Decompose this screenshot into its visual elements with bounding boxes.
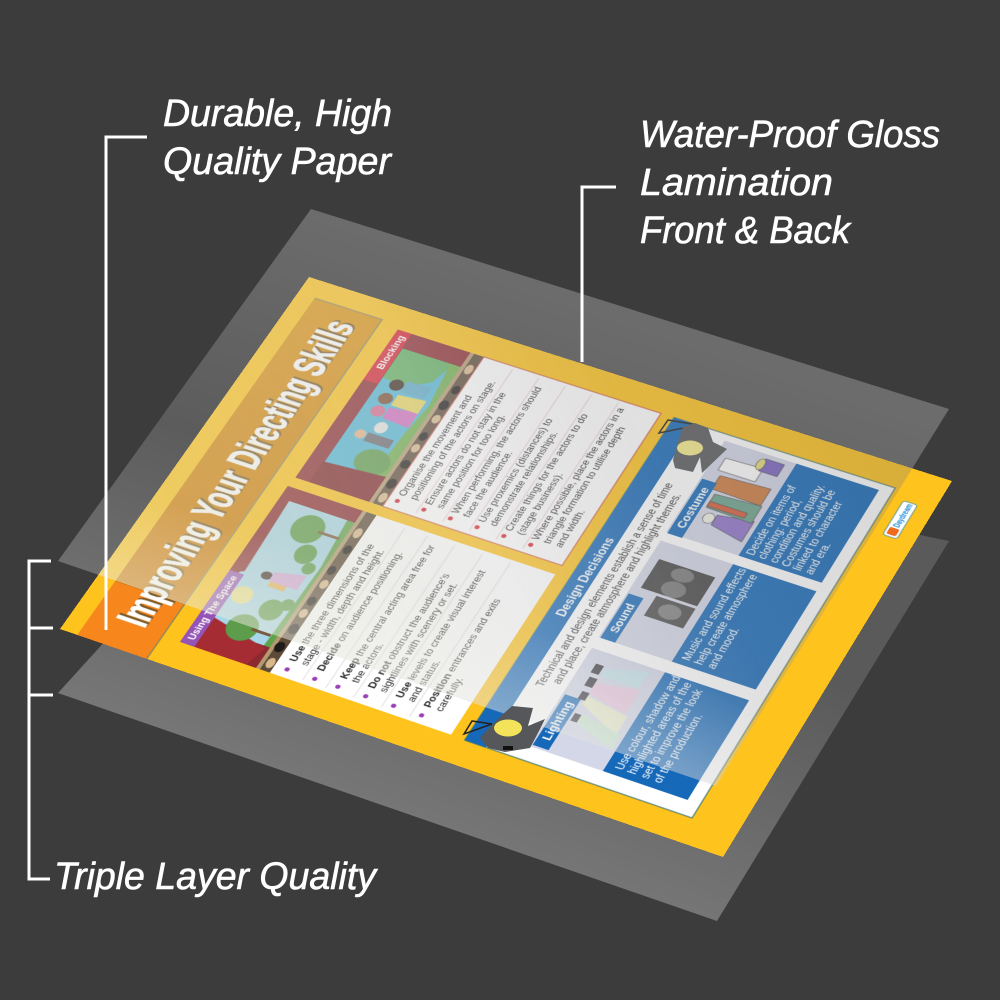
text box: blocking bullets: When performing, the actors should bbox=[454, 396, 559, 520]
text box: lighting: highlighted areas of the bbox=[609, 670, 683, 754]
column: lighting bbox=[529, 647, 749, 800]
tag: costume: Costume bbox=[677, 490, 719, 532]
top lamination sheet bbox=[58, 209, 949, 786]
text box: using the space bullets: Use the three dimensions of the bbox=[285, 546, 380, 658]
heading: lamination: Front & Back bbox=[640, 210, 852, 252]
text box: using the space bullets: the actors. bbox=[346, 637, 384, 676]
tag: sound: Sound bbox=[602, 599, 635, 629]
intro text: Technical and design elements establish a sense of time bbox=[527, 487, 683, 678]
tag: lighting: Lighting bbox=[528, 688, 567, 726]
panel: using the space bbox=[180, 486, 555, 735]
column: sound bbox=[599, 541, 816, 690]
speakers illustration bbox=[627, 559, 715, 629]
heading: lamination bbox=[640, 114, 940, 252]
header band bbox=[465, 417, 695, 747]
callout: lamination bracket bbox=[582, 187, 616, 362]
stage illustration bbox=[180, 486, 376, 673]
text box: using the space bullets: Position entrances and exits bbox=[415, 596, 502, 698]
text box: using the space bullets: sightlines with scenery or set. bbox=[373, 582, 461, 685]
heading: durable paper: Quality Paper bbox=[163, 141, 392, 183]
tag: sound bbox=[600, 593, 644, 643]
callout: durable paper bracket bbox=[106, 137, 147, 630]
text box: blocking bullets: demonstrate relationships. bbox=[491, 438, 572, 531]
heading: lamination: Lamination bbox=[640, 162, 833, 204]
text box: blocking bullets: Where possible, place the actors in a bbox=[532, 415, 641, 544]
text box: using the space bullets: Use levels to create visual interest bbox=[388, 570, 489, 689]
column: costume bbox=[666, 441, 879, 583]
stage illustration bbox=[295, 329, 484, 506]
text box: using the space bullets: and status. bbox=[399, 652, 439, 693]
poster background bbox=[60, 277, 952, 857]
heading: durable paper bbox=[163, 93, 392, 183]
text box: sound: and mood. bbox=[695, 620, 735, 660]
text box: sound: help create atmosphere bbox=[683, 571, 758, 657]
text box: using the space bullets: stage - width, depth and height. bbox=[296, 551, 390, 661]
text box: blocking bullets bbox=[383, 357, 661, 565]
text box: blocking bullets: Organise the movement and bbox=[402, 404, 487, 504]
text box: using the space bullets: Do not obstruct the audience's bbox=[361, 573, 453, 681]
panel: design decisions bbox=[465, 417, 895, 818]
text box: blocking bullets: Create things for the actors to do bbox=[506, 421, 604, 536]
heading: durable paper: Durable, High bbox=[163, 93, 392, 135]
text box: blocking bullets: face the audience. bbox=[465, 458, 525, 523]
text box: using the space bullets: Decide on audience positioning. bbox=[312, 553, 408, 666]
text box: using the space bullets: carefully. bbox=[426, 668, 461, 701]
text box: blocking bullets: Use proxemics (distances) to bbox=[480, 426, 568, 528]
callout: triple layer bracket bbox=[29, 561, 53, 879]
text box: costume: Decide on items of bbox=[744, 488, 806, 556]
text box: blocking bullets: Ensure actors do not stay in the bbox=[428, 401, 522, 512]
text box: lighting: set to improve the look bbox=[621, 676, 694, 758]
tag: blocking: Blocking bbox=[386, 346, 422, 382]
text box: blocking bullets: (stage business). bbox=[517, 478, 573, 539]
text box: costume: Costumes should be bbox=[778, 492, 844, 567]
text box: costume: clothing: period, bbox=[756, 501, 809, 560]
bottom lamination sheet bbox=[58, 410, 949, 921]
logo badge: Daydream bbox=[892, 504, 918, 529]
text box: blocking bullets: same position for too long. bbox=[439, 422, 519, 515]
text box: lighting bbox=[603, 672, 749, 800]
text box: costume: and era. bbox=[800, 541, 834, 573]
header band: Design Decisions bbox=[549, 537, 620, 614]
costumes illustration bbox=[684, 448, 789, 542]
characters bbox=[351, 376, 435, 450]
text box: lighting: of the production. bbox=[633, 698, 691, 762]
overlays, lamps, callouts and labels bbox=[28, 98, 940, 898]
text box: blocking bullets: positioning of the actors on stage. bbox=[413, 390, 512, 507]
text box: costume: linked to character bbox=[789, 502, 850, 570]
lamp: lower left stage light bbox=[464, 706, 545, 752]
logo badge bbox=[883, 501, 918, 539]
top sheet wash over poster bbox=[98, 277, 912, 786]
panel: blocking bbox=[295, 329, 661, 565]
text box: costume: condition and quality. bbox=[767, 487, 834, 563]
tag: using the space: Using The Space bbox=[185, 577, 242, 639]
poster: Improving Your Directing Skills bbox=[60, 277, 952, 857]
intro text: and place, create atmosphere and highlight themes. bbox=[543, 497, 690, 675]
tag: lighting bbox=[533, 694, 581, 750]
text box: blocking bullets: triangle formation to utilise depth bbox=[544, 434, 640, 547]
lighting rig illustration bbox=[554, 655, 659, 750]
text box: using the space bullets: Keep the central acting area free for bbox=[335, 546, 441, 673]
text box: sound: Music and sound effects bbox=[671, 566, 747, 653]
text box: blocking bullets: and width. bbox=[555, 513, 593, 551]
text box: costume bbox=[738, 464, 879, 583]
heading: triple layer quality: Triple Layer Quality bbox=[54, 856, 378, 898]
text box: sound bbox=[672, 564, 816, 690]
text box: lighting: Use colour, shadow and bbox=[598, 664, 673, 751]
tag: blocking bbox=[363, 329, 412, 384]
title band bbox=[77, 298, 382, 659]
text box: using the space bullets bbox=[270, 515, 555, 735]
heading: lamination: Water-Proof Gloss bbox=[640, 114, 940, 156]
lamp: upper right stage light bbox=[659, 420, 727, 473]
tag: costume bbox=[667, 479, 717, 538]
